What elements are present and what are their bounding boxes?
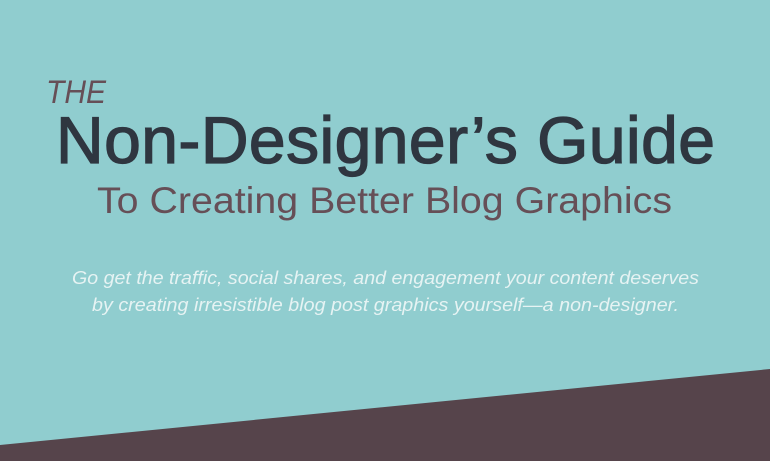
subtitle: To Creating Better Blog Graphics — [97, 180, 672, 221]
intro line 2: by creating irresistible blog post graphics yourself—a non-designer. — [92, 294, 679, 315]
intro line 1: Go get the traffic, social shares, and engagement your content deserves — [72, 267, 699, 288]
diagonal footer band — [0, 369, 770, 461]
intro text — [72, 267, 699, 315]
kicker: THE: THE — [46, 74, 107, 110]
title: Non-Designer’s Guide — [56, 103, 715, 177]
